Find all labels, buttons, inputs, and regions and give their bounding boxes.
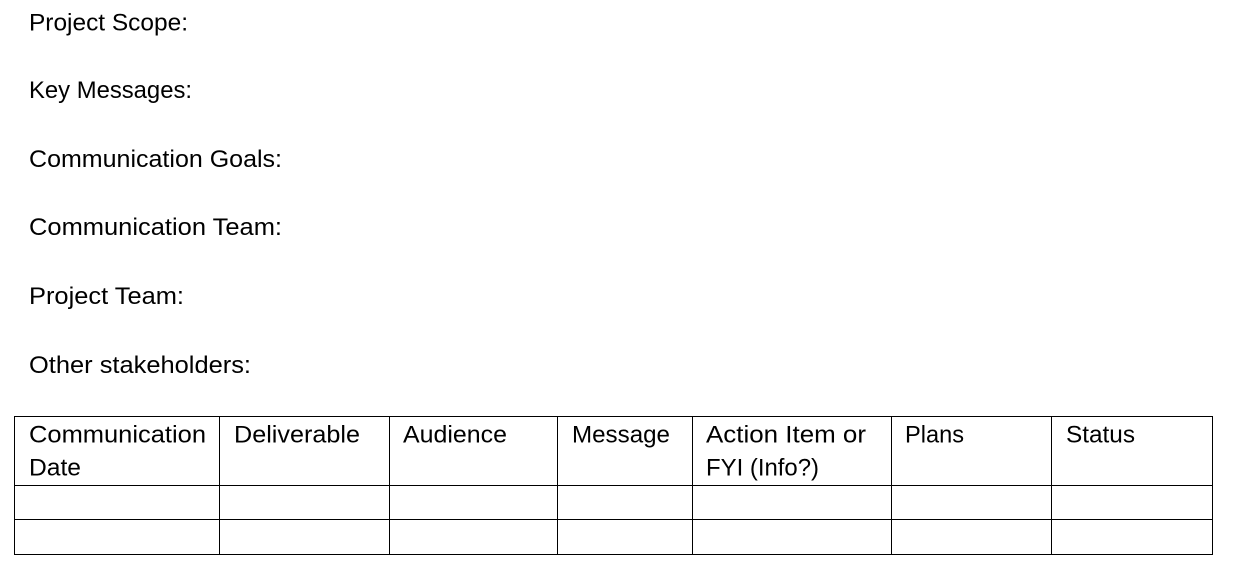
header: action item or FYI (706, 422, 866, 482)
header: communication date (29, 422, 206, 482)
label: communication team: Communication Team: (29, 214, 282, 241)
header: communication date: Date (29, 454, 81, 482)
header: message: Message (572, 422, 670, 448)
label: communication goals: Communication Goals: (29, 146, 282, 173)
header: action item or FYI: Action Item or (706, 422, 866, 448)
label: project team: Project Team: (29, 283, 184, 310)
table grid (14, 416, 1213, 555)
header: audience: Audience (403, 422, 507, 448)
communication schedule table (14, 416, 1213, 555)
label: other stakeholders: Other stakeholders: (29, 352, 251, 379)
header: action item or FYI: FYI (Info?) (706, 454, 819, 482)
header: communication date: Communication (29, 422, 206, 448)
field labels (29, 10, 282, 379)
header: status: Status (1066, 422, 1135, 448)
header: plans: Plans (905, 422, 964, 448)
label: key messages: Key Messages: (29, 77, 192, 104)
label: project scope: Project Scope: (29, 10, 188, 36)
header: deliverable: Deliverable (234, 422, 360, 448)
